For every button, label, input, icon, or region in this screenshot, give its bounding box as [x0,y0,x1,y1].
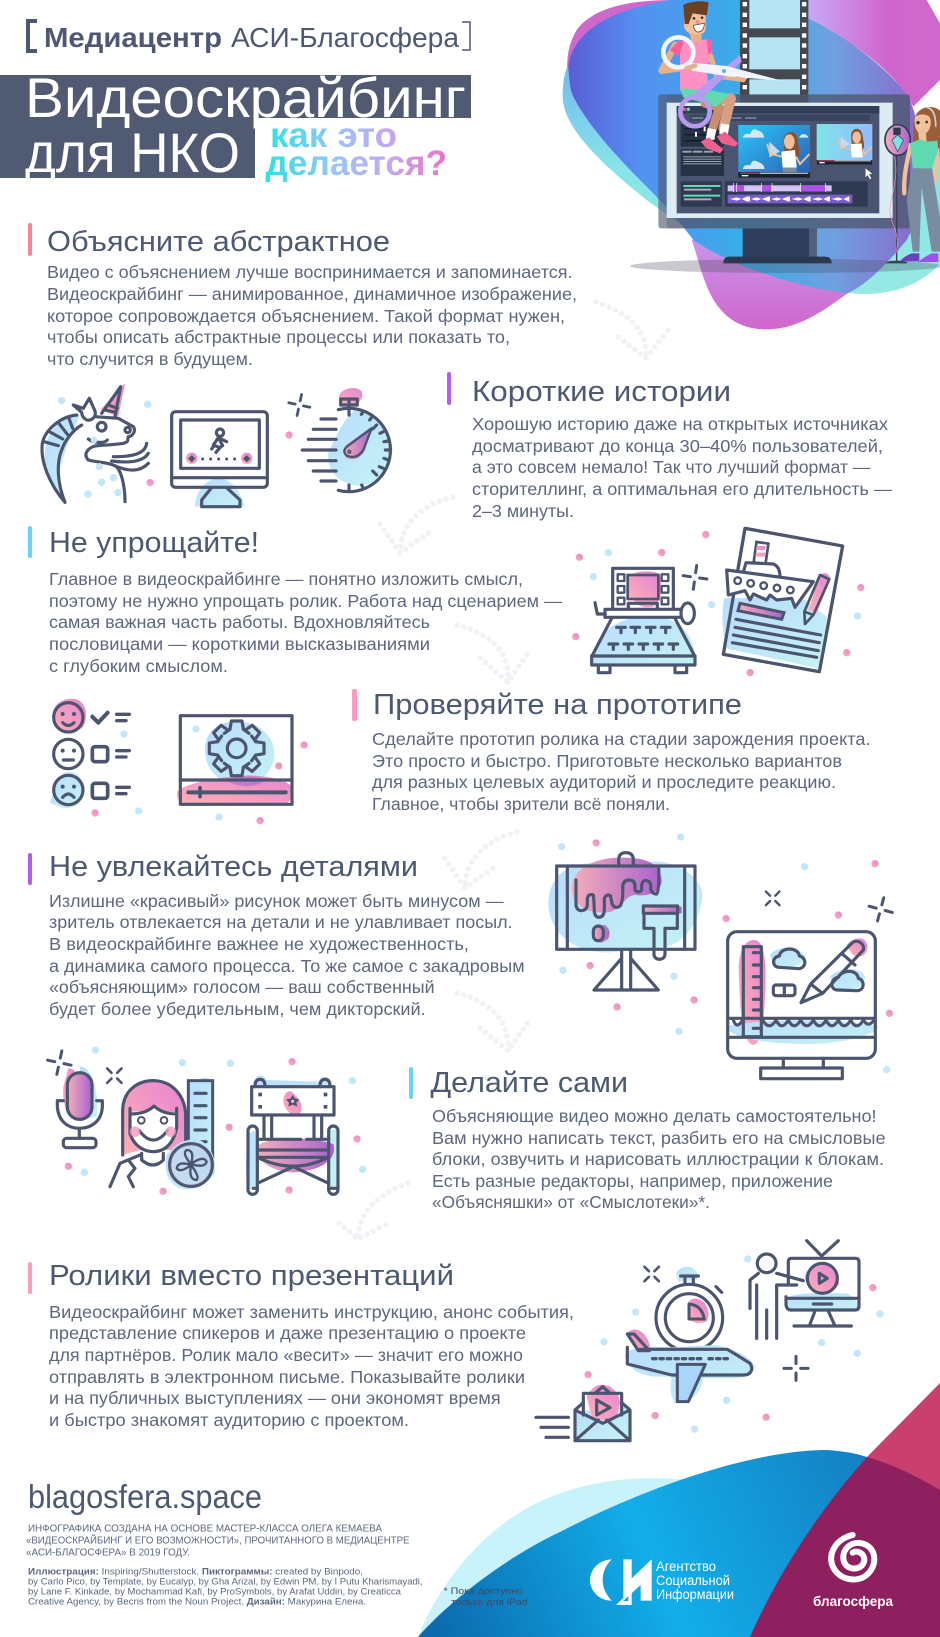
timeline [681,181,868,207]
title block: как это [270,116,397,155]
title block: делается? [266,144,447,183]
site address: blagosfera.space [28,1478,262,1515]
decorative arrow 6 [339,1183,408,1239]
icon: narrator girl with measuring strip [110,1059,234,1195]
panel: do not simplify [28,526,563,676]
paragraph: отправлять в электронном письме. Показывайте ролики [49,1367,525,1387]
paragraph: что случится в будущем. [47,349,253,369]
paragraph: и на публичных выступлениях — они экономят время [49,1388,501,1408]
paragraph: пословицами — короткими высказываниями [49,634,430,654]
logo: Agency for Social Information [590,1559,734,1605]
panel: videos instead of presentations [28,1260,574,1430]
panel: videos instead of presentations: Ролики вместо презентаций [49,1260,454,1292]
icons: easel and design monitor [548,833,895,1079]
logo: Agency for Social Information: Агентство [656,1559,716,1574]
icons: stopwatch, plane, envelope, presenter [536,1241,884,1441]
footnote: credits [28,1567,423,1607]
paragraph [472,414,893,521]
paragraph: зритель отвлекается на детали и не улавливает посыл. [49,912,513,932]
title block [0,66,471,184]
icons: microphone, narrator, director chair [45,1046,366,1195]
video preview small [817,124,872,165]
paragraph: досматривают до конца 30–40% пользователей, [472,436,883,456]
bottom color shapes [418,1383,940,1637]
footnote: credits: by Lane F. Kinkade, by Mochammad Kafi, by ProSymbols, by Arafat Uddin, by Creaticca [28,1587,401,1597]
paragraph [47,262,577,369]
footnote: source of the infographic: «ВИДЕОСКРАЙБИНГ И ЕГО ВОЗМОЖНОСТИ», ПРОЧИТАННОГО В МЕДИАЦЕНТРЕ [26,1534,410,1546]
paragraph: Хорошую историю даже на открытых источниках [472,414,888,434]
decorative arrow 2 [380,497,453,553]
paragraph [432,1106,886,1212]
icon: microphone [45,1046,129,1176]
icon: unicorn [42,383,154,503]
man with scissors [662,1,782,153]
footnote: source of the infographic [26,1522,410,1558]
paragraph: «объясняющим» голосом — ваш собственный [49,977,435,997]
paragraph: для разных целевых аудиторий и проследите реакцию. [372,772,836,792]
icon: settings window [177,716,308,824]
panel: explain the abstract [28,223,577,369]
logo: Blagosfera: благосфера [813,1593,893,1609]
paragraph: а это совсем немало! Так что лучший формат — [472,457,871,477]
paragraph: Видеоскрайбинг может заменить инструкцию, анонс события, [49,1302,574,1322]
paragraph: 2–3 минуты. [472,501,574,521]
panel: do not simplify: Не упрощайте! [49,527,259,559]
decorative arrow 4 [445,832,517,888]
panel: short stories: Короткие истории [472,376,731,408]
icons row: unicorn, monitor, stopwatch [42,383,391,507]
shadow under monitor [630,259,940,273]
paragraph: которое сопровождается объяснением. Такой формат нужен, [47,306,565,326]
decorative arrow 5 [457,993,529,1051]
panel: check on a prototype: Проверяйте на прототипе [373,689,742,721]
title block: Видеоскрайбинг [25,66,466,129]
decorative arrow 3 [457,625,529,682]
logo: Blagosfera [813,1535,893,1609]
logo: Agency for Social Information: Информации [656,1587,734,1602]
paragraph: Объясняющие видео можно делать самостоятельно! [432,1106,876,1126]
paragraph: сторителлинг, а оптимальная его длительность — [472,479,893,499]
panel: do it yourself [409,1067,886,1212]
decorative arrow 1 [596,302,668,358]
panel: short stories [447,372,893,521]
icon: airplane [584,1308,808,1433]
logo: Agency for Social Information: Социальной [656,1573,730,1588]
footnote: source of the infographic: «АСИ-БЛАГОСФЕРА» В 2019 ГОДУ. [26,1546,190,1558]
paragraph [372,729,870,814]
paragraph [49,1302,574,1430]
icon: design monitor [722,860,895,1079]
woman with microphone [885,107,940,263]
icon: envelope with video [536,1385,630,1441]
paragraph: Видео с объяснением лучше воспринимается и запоминается. [47,262,572,282]
panel: do not get carried away with details: Не увлекайтесь деталями [49,851,418,883]
paragraph: а динамика самого процесса. То же самое с закадровым [49,956,525,976]
paragraph: Сделайте прототип ролика на стадии зарождения проекта. [372,729,870,749]
header: Mediacenter brand: АСИ-Благосфера [231,22,459,53]
icons: typewriter and script page [572,528,864,676]
panel: do not get carried away with details [28,851,525,1019]
paragraph: будет более убедительным, чем дикторский. [49,999,426,1019]
paragraph: и быстро знакомят аудиторию с проектом. [49,1410,409,1430]
footnote: credits: Иллюстрация: Inspiring/Shutterstock. Пиктограммы: created by Binpodo, [28,1567,363,1577]
icon: director chair [246,1058,366,1194]
paragraph [49,569,563,676]
footnote: iPad note [444,1586,528,1607]
monitor [658,94,910,263]
paragraph: В видеоскрайбинге важнее не художественность, [49,934,469,954]
icon: stopwatch [637,1260,723,1351]
footnote: iPad note: * Пока доступно [444,1586,523,1596]
paragraph: с глубоким смыслом. [49,656,228,676]
footnote: credits: Creative Agency, by Becris from the Noun Project. Дизайн: Макурина Елена. [28,1597,366,1607]
panel: do it yourself: Делайте сами [430,1067,628,1099]
paragraph: блоки, озвучить и нарисовать иллюстрации к блокам. [432,1149,884,1169]
paragraph: Вам нужно написать текст, разбить его на смысловые [432,1128,886,1148]
confetti dots [572,531,864,676]
paragraph: Главное в видеоскрайбинге — понятно изложить смысл, [49,569,523,589]
header: Mediacenter brand: Медиацентр [44,22,222,53]
paragraph: «Объясняшки» от «Смыслотеки»*. [432,1192,710,1212]
icon: presenter with TV [744,1241,884,1357]
icon: script page with ship [722,528,843,672]
icon: typewriter [592,564,709,673]
footnote: source of the infographic: ИНФОГРАФИКА СОЗДАНА НА ОСНОВЕ МАСТЕР-КЛАССА ОЛЕГА КЕМАЕВА [28,1522,382,1534]
icon: reaction checklist [50,699,142,817]
video preview large [738,125,810,178]
film strip [740,0,808,103]
paragraph [49,891,525,1019]
paragraph: Излишне «красивый» рисунок может быть минусом — [49,891,504,911]
footnote: credits: by Carlo Pico, by Template, by Eucalyp, by Gha Arizal, by Edwin PM, by I Putu Kharismayadi, [28,1577,423,1587]
hero illustration: video editor on a blob [563,0,940,329]
icon: game monitor [172,412,267,507]
paragraph: Это просто и быстро. Приготовьте несколько вариантов [372,751,842,771]
icon: easel [548,833,702,1035]
paragraph: Есть разные редакторы, например, приложение [432,1171,833,1191]
icon: stopwatch [285,388,391,492]
paragraph: для партнёров. Ролик мало «весит» — значит его можно [49,1345,523,1365]
paragraph: самая важная часть работы. Вдохновляйтесь [49,612,430,632]
paragraph: чтобы описать абстрактные процессы или показать то, [47,327,510,347]
panel: explain the abstract: Объясните абстрактное [47,226,390,258]
paragraph: представление спикеров и даже презентацию о проекте [49,1323,526,1343]
paragraph: Видеоскрайбинг — анимированное, динамичное изображение, [47,284,577,304]
icons: reaction faces and settings window [50,699,308,824]
footnote: iPad note: только для iPad [451,1597,528,1607]
panel: check on a prototype [352,689,870,814]
title block: для НКО [25,121,240,184]
paragraph: Главное, чтобы зрители всё поняли. [372,794,670,814]
header: Mediacenter brand [28,21,470,53]
paragraph: поэтому не нужно упрощать ролик. Работа над сценарием — [49,591,563,611]
